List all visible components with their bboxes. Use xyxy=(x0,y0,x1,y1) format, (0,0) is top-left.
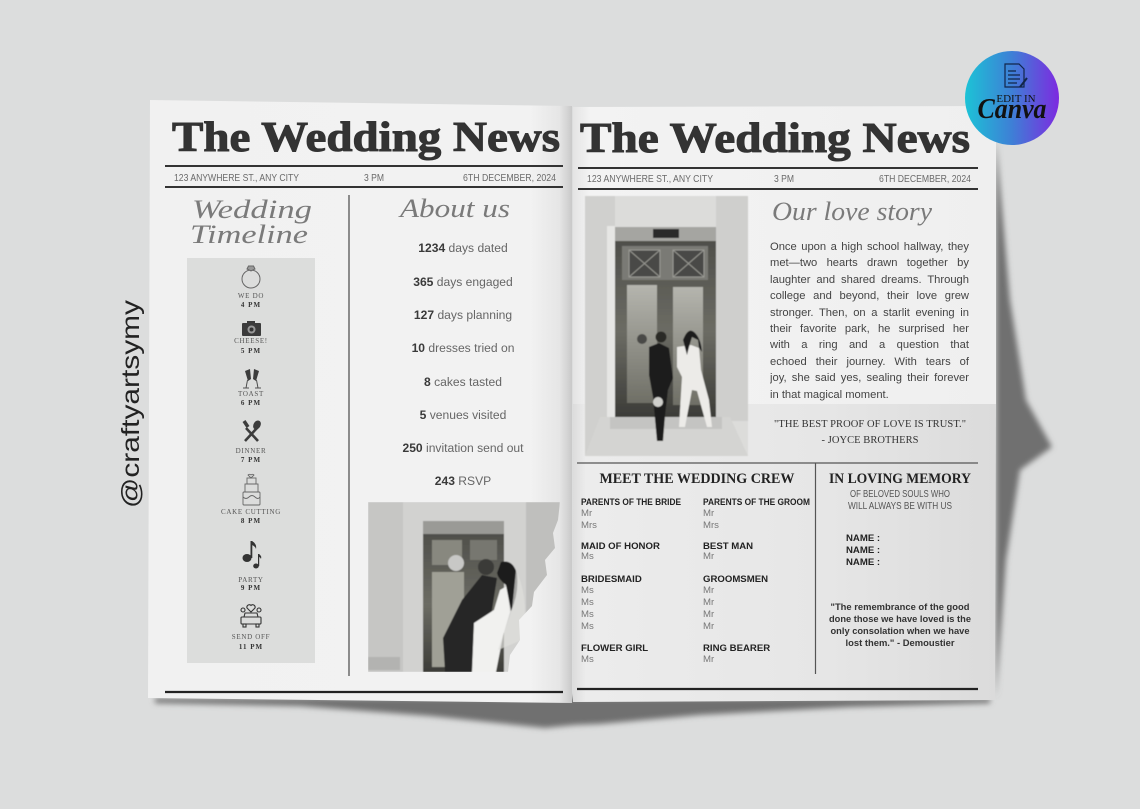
label: we do: 4 PM xyxy=(241,301,261,309)
crew column: groom side: BEST MAN xyxy=(703,541,753,552)
label: cheese: 5 PM xyxy=(241,347,261,355)
column divider xyxy=(348,195,350,676)
label: toast: 6 PM xyxy=(241,399,261,407)
label: cheese xyxy=(234,337,268,355)
label: toast xyxy=(238,390,264,407)
stats list: 1234 days dated xyxy=(418,241,508,255)
crew column: bride side: BRIDESMAID xyxy=(581,574,642,585)
stats list: 250 invitation send out xyxy=(402,441,524,455)
love story text: joy, she said yes, sealing their forever xyxy=(770,372,969,384)
stats list: 10 dresses tried on xyxy=(412,341,514,355)
love story text: met—two hearts drawn together by xyxy=(770,257,969,269)
quote: demoustier: lost them." - Demoustier xyxy=(846,638,955,649)
label: we do xyxy=(238,292,264,309)
canva text: Canva xyxy=(978,94,1046,125)
heading: wedding timeline: Wedding xyxy=(192,195,312,224)
dateline left: 6TH DECEMBER, 2024 xyxy=(463,172,556,184)
label: party xyxy=(238,576,264,592)
icon: fork and spoon xyxy=(244,421,261,441)
label: dinner: DINNER xyxy=(236,447,266,455)
crew column: bride side: MAID OF HONOR xyxy=(581,541,660,552)
love story text: in that magical moment. xyxy=(770,389,889,401)
crew column: groom side: Mr xyxy=(703,609,715,620)
names: NAME : xyxy=(846,557,880,568)
dateline right xyxy=(587,173,971,185)
love story text: stronger. Then, on a starlit evening in xyxy=(770,307,969,319)
page shadow xyxy=(155,140,1052,728)
crew column: bride side: Mrs xyxy=(581,520,597,531)
stats list: 8 cakes tasted xyxy=(424,375,502,389)
crew column: groom side: GROOMSMEN xyxy=(703,574,768,585)
label: party: 9 PM xyxy=(241,584,261,592)
masthead rules right xyxy=(578,168,978,189)
label: cake cutting: 8 PM xyxy=(241,517,261,525)
groom xyxy=(649,343,673,441)
crew column: bride side: FLOWER GIRL xyxy=(581,643,648,654)
badge: edit in canva xyxy=(965,51,1059,145)
quote: demoustier: only consolation when we have xyxy=(830,626,970,637)
label: cake cutting: CAKE CUTTING xyxy=(221,508,281,516)
dateline right: 123 ANYWHERE ST., ANY CITY xyxy=(587,173,713,185)
masthead title right: The Wedding News xyxy=(580,116,970,162)
love story text xyxy=(770,239,969,405)
crew column: bride side: Mr xyxy=(581,508,593,519)
groom xyxy=(443,575,497,672)
crew column: groom side: Mr xyxy=(703,621,715,632)
label: send off xyxy=(232,633,270,651)
label: cheese: CHEESE! xyxy=(234,337,268,345)
love story text: college and beyond, their love grew xyxy=(770,290,969,302)
dateline left: 3 PM xyxy=(364,172,384,184)
crew column: bride side: Ms xyxy=(581,609,594,620)
heading: our love story: Our love story xyxy=(772,197,932,226)
crew column: groom side: Mr xyxy=(703,597,715,608)
label: party: PARTY xyxy=(238,576,264,584)
dateline right: 3 PM xyxy=(774,173,794,185)
crew column: bride side: Ms xyxy=(581,597,594,608)
masthead title left: The Wedding News xyxy=(172,115,560,161)
heading: wedding timeline xyxy=(190,195,312,249)
subheading: OF BELOVED SOULS WHO xyxy=(850,489,950,500)
section rules xyxy=(577,463,978,674)
panel: wedding crew xyxy=(581,471,810,665)
stats list: 243 RSVP xyxy=(435,474,491,488)
icon: wedding car xyxy=(241,605,261,627)
bottom rule right xyxy=(577,688,978,690)
quote: demoustier: done those we have loved is the xyxy=(829,614,971,625)
photo: couple at door xyxy=(585,196,748,456)
dateline left xyxy=(174,172,556,184)
names: NAME : xyxy=(846,545,880,556)
bottom rule left xyxy=(165,691,563,693)
love story text: Once upon a high school hallway, they xyxy=(770,241,969,253)
subheading: WILL ALWAYS BE WITH US xyxy=(848,501,952,512)
crew column: groom side xyxy=(703,497,810,665)
quote: joyce brothers: - JOYCE BROTHERS xyxy=(822,435,919,446)
panel: left newspaper page xyxy=(148,100,572,703)
crew column: bride side: Ms xyxy=(581,551,594,562)
crew column: bride side: Ms xyxy=(581,621,594,632)
masthead rules left xyxy=(165,166,563,187)
label: we do: WE DO xyxy=(238,292,264,300)
label: send off: 11 PM xyxy=(239,643,263,651)
crew column: bride side: PARENTS OF THE BRIDE xyxy=(581,497,682,508)
icon: cake xyxy=(243,474,260,505)
icon: camera xyxy=(242,321,261,336)
label: cake cutting xyxy=(221,508,281,525)
label: dinner: 7 PM xyxy=(241,456,261,464)
crew column: groom side: Mr xyxy=(703,508,715,519)
crew column: groom side: PARENTS OF THE GROOM xyxy=(703,497,810,508)
icon: ring xyxy=(242,266,260,288)
icon: music notes xyxy=(242,541,261,568)
heading: in loving memory: IN LOVING MEMORY xyxy=(829,471,971,487)
bride xyxy=(677,345,712,427)
crew column: groom side: Mr xyxy=(703,551,715,562)
quote: joyce brothers xyxy=(774,419,966,446)
bouquet xyxy=(448,555,464,571)
quote: demoustier: "The remembrance of the good xyxy=(830,602,970,613)
dateline right: 6TH DECEMBER, 2024 xyxy=(879,173,971,185)
panel: in loving memory xyxy=(829,471,971,649)
crew column: bride side: Ms xyxy=(581,654,594,665)
names xyxy=(846,533,880,568)
quote: demoustier xyxy=(829,602,971,649)
watermark handle: @craftyartsymy xyxy=(117,299,145,508)
photo: couple kissing, torn edge xyxy=(368,502,560,672)
heading: wedding timeline: Timeline xyxy=(190,220,308,249)
canva text: EDIT IN xyxy=(996,93,1036,105)
love story text: echoed their journey. With tears of xyxy=(770,356,969,368)
heading: about us: About us xyxy=(398,194,510,223)
love story text: laughter and shared dreams. Through xyxy=(770,274,969,286)
love story text: with a ring and a question that xyxy=(770,339,969,351)
icon: toast glasses xyxy=(243,369,261,388)
stats list: 127 days planning xyxy=(414,308,512,322)
crew column: bride side xyxy=(581,497,682,665)
label: send off: SEND OFF xyxy=(232,633,270,641)
label: dinner xyxy=(236,447,266,464)
quote: joyce brothers: "THE BEST PROOF OF LOVE IS TRUST." xyxy=(774,419,966,430)
love story text: their favorite park, he surprised her xyxy=(770,323,969,335)
icon: document with pen xyxy=(1005,64,1027,87)
panel: right newspaper page xyxy=(573,106,996,702)
crew column: groom side: Mr xyxy=(703,585,715,596)
crew column: bride side: Ms xyxy=(581,585,594,596)
panel: timeline xyxy=(187,258,315,663)
stats list: 5 venues visited xyxy=(420,408,506,422)
names: NAME : xyxy=(846,533,880,544)
bride xyxy=(472,586,510,672)
crew column: groom side: Mr xyxy=(703,654,715,665)
crew column: groom side: RING BEARER xyxy=(703,643,770,654)
stats list xyxy=(402,241,524,488)
heading: wedding crew: MEET THE WEDDING CREW xyxy=(600,471,795,487)
label: toast: TOAST xyxy=(238,390,264,398)
crew column: groom side: Mrs xyxy=(703,520,719,531)
subheading xyxy=(848,489,952,512)
stats list: 365 days engaged xyxy=(413,275,513,289)
dateline left: 123 ANYWHERE ST., ANY CITY xyxy=(174,172,299,184)
